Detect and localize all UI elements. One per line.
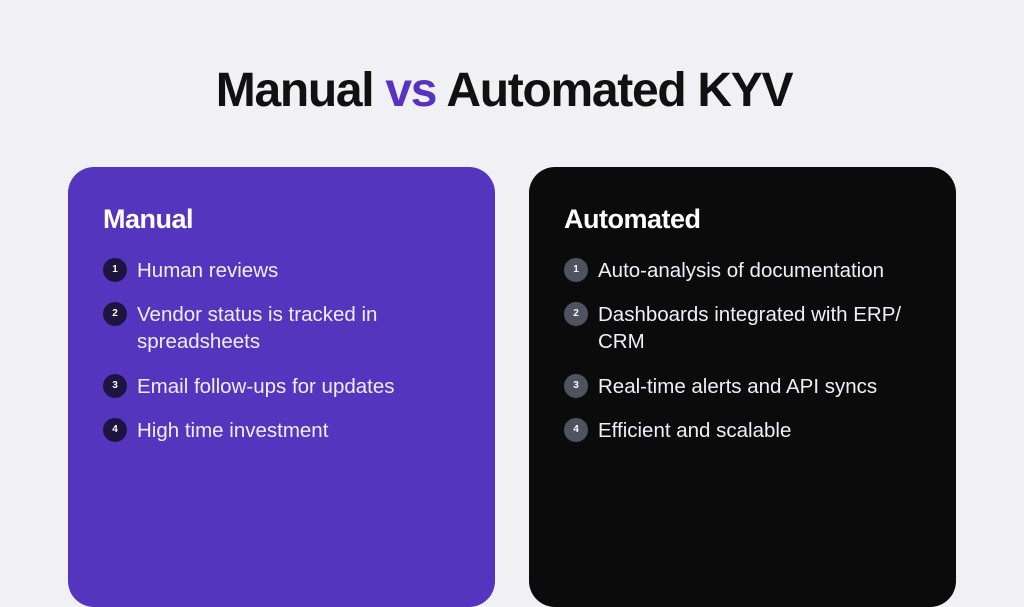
panel: automated: CRM bbox=[598, 330, 645, 353]
item 2 bbox=[103, 302, 377, 353]
panel: automated: 2 bbox=[573, 308, 579, 319]
panel: automated: 3 bbox=[573, 380, 579, 391]
item 4 bbox=[103, 418, 328, 442]
panel: automated bbox=[529, 167, 956, 607]
panel: automated: 4 bbox=[573, 424, 579, 435]
panel: manual: 1 bbox=[112, 264, 118, 275]
heading: automated: Automated bbox=[564, 204, 700, 234]
panel: manual: Email follow-ups for updates bbox=[137, 375, 395, 398]
title: Manual vs Automated KYV bbox=[216, 64, 792, 117]
panel: manual: 2 bbox=[112, 308, 118, 319]
panel: automated: Efficient and scalable bbox=[598, 419, 791, 442]
panel: manual: spreadsheets bbox=[137, 330, 260, 353]
panel: manual: High time investment bbox=[137, 419, 328, 442]
item 1 bbox=[564, 258, 884, 282]
item 2 bbox=[564, 302, 902, 353]
panel: automated: Dashboards integrated with ERP/ bbox=[598, 303, 901, 326]
heading: manual: Manual bbox=[103, 204, 193, 234]
item 1 bbox=[103, 258, 278, 282]
panel: manual: Human reviews bbox=[137, 259, 278, 282]
item 3 bbox=[564, 374, 877, 398]
panel: automated: 1 bbox=[573, 264, 579, 275]
panel: manual: 3 bbox=[112, 380, 118, 391]
panel: manual: 4 bbox=[112, 424, 118, 435]
panel: manual: Vendor status is tracked in bbox=[137, 303, 377, 326]
panel: automated: Auto-analysis of documentation bbox=[598, 259, 884, 282]
panel: automated: Real-time alerts and API syncs bbox=[598, 375, 877, 398]
item 4 bbox=[564, 418, 791, 442]
item 3 bbox=[103, 374, 395, 398]
panel: manual bbox=[68, 167, 495, 607]
